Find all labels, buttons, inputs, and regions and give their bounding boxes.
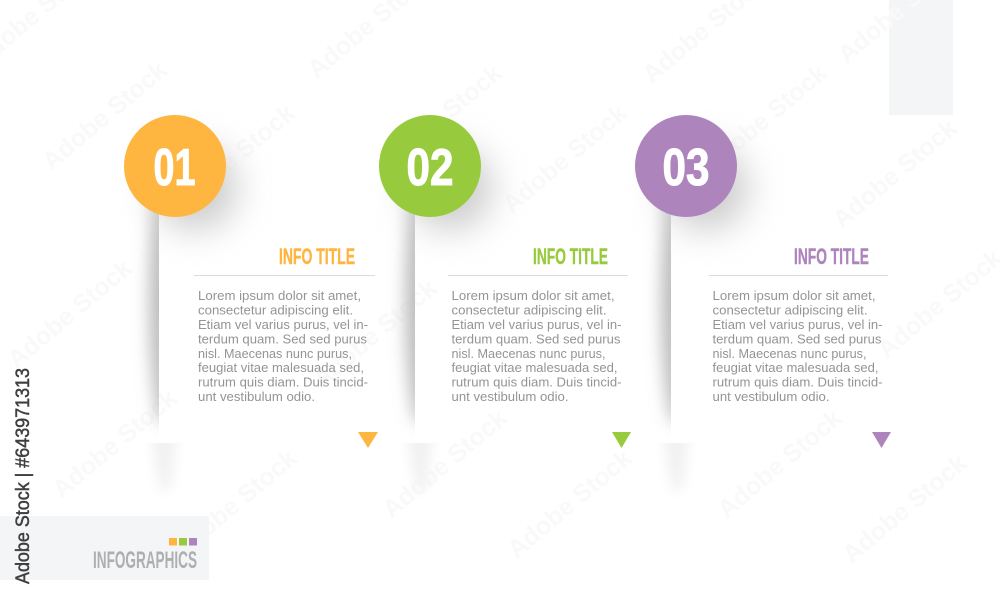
watermark pattern: Adobe Stock — [2, 254, 137, 374]
body text 02 — [452, 289, 622, 404]
watermark pattern: Adobe Stock — [37, 56, 172, 176]
body text 02: terdum quam. Sed sed purus — [452, 332, 620, 346]
body text 02: consectetur adipiscing elit. — [452, 303, 606, 317]
body text 03: terdum quam. Sed sed purus — [712, 332, 882, 346]
circle shadow 01 — [153, 146, 237, 230]
watermark pattern: Adobe Stock — [47, 384, 182, 504]
body text 02: Lorem ipsum dolor sit amet, — [452, 289, 614, 303]
lower shadow 01 — [154, 443, 175, 484]
logo panel: infographics — [0, 516, 209, 580]
body text 01: rutrum quis diam. Duis tincid- — [198, 376, 368, 390]
circle shadow 03 — [664, 146, 748, 230]
body text 01: nisl. Maecenas nunc purus, — [198, 347, 352, 361]
body text 01: terdum quam. Sed sed purus — [198, 332, 367, 346]
decorative panel: top right — [889, 0, 953, 115]
number badge 02: 02 — [406, 139, 454, 197]
watermark pattern: Adobe Stock — [377, 404, 512, 524]
panel shadow 01 — [140, 208, 159, 427]
body text 01: Etiam vel varius purus, vel in- — [198, 318, 368, 332]
body text 03: nisl. Maecenas nunc purus, — [712, 347, 866, 361]
title 03: INFO TITLE — [794, 244, 869, 269]
watermark pattern: Adobe Stock — [502, 444, 637, 564]
body text 02: rutrum quis diam. Duis tincid- — [452, 376, 622, 390]
panel: step 01 — [124, 115, 378, 490]
body text 02: nisl. Maecenas nunc purus, — [452, 347, 606, 361]
watermark pattern: Adobe Stock — [307, 274, 442, 394]
lower shadow 02 — [410, 443, 431, 482]
body text 03: Lorem ipsum dolor sit amet, — [712, 289, 876, 303]
watermark pattern: Adobe Stock — [165, 99, 300, 219]
body text 03 — [712, 289, 882, 404]
watermark pattern: Adobe Stock — [837, 449, 972, 569]
number badge 02 — [379, 115, 481, 217]
stock id label: Adobe Stock | #643971313 — [12, 368, 34, 584]
watermark pattern: Adobe Stock — [697, 59, 832, 179]
body text 01: unt vestibulum odio. — [198, 390, 315, 404]
circle shadow 02 — [408, 146, 492, 230]
number badge 03: 03 — [662, 139, 710, 197]
watermark pattern: Adobe Stock — [167, 444, 302, 564]
body text 03: feugiat vitae malesuada sed, — [712, 361, 878, 375]
body text 01: feugiat vitae malesuada sed, — [198, 361, 364, 375]
body text 01: consectetur adipiscing elit. — [198, 303, 353, 317]
body text 03: rutrum quis diam. Duis tincid- — [712, 376, 882, 390]
panel: step 02 — [379, 115, 631, 490]
body text 01 — [198, 289, 368, 404]
number badge 01: 01 — [154, 139, 196, 197]
logo text: INFOGRAPHICS — [93, 547, 197, 574]
body text 03: consectetur adipiscing elit. — [712, 303, 868, 317]
title 02: INFO TITLE — [533, 244, 608, 269]
logo squares — [169, 538, 197, 546]
body text 02: feugiat vitae malesuada sed, — [452, 361, 618, 375]
watermark pattern: Adobe Stock — [497, 99, 632, 219]
number badge 01 — [124, 115, 226, 217]
body text 03: unt vestibulum odio. — [712, 390, 830, 404]
body text 02: unt vestibulum odio. — [452, 390, 568, 404]
watermark pattern: Adobe Stock — [712, 404, 847, 524]
body text 01: Lorem ipsum dolor sit amet, — [198, 289, 361, 303]
panel shadow 03 — [652, 209, 671, 427]
lower shadow 03 — [666, 443, 687, 484]
arrow 01 — [358, 432, 378, 448]
panel shadow 02 — [396, 209, 415, 427]
arrow 02 — [612, 432, 631, 448]
title 01: INFO TITLE — [279, 244, 355, 269]
watermark pattern: Adobe Stock — [827, 114, 962, 234]
body text 02: Etiam vel varius purus, vel in- — [452, 318, 622, 332]
body text 03: Etiam vel varius purus, vel in- — [712, 318, 882, 332]
number badge 03 — [635, 115, 737, 217]
arrow 03 — [872, 432, 891, 448]
watermark pattern: Adobe Stock — [372, 59, 507, 179]
panel: step 03 — [635, 115, 891, 490]
